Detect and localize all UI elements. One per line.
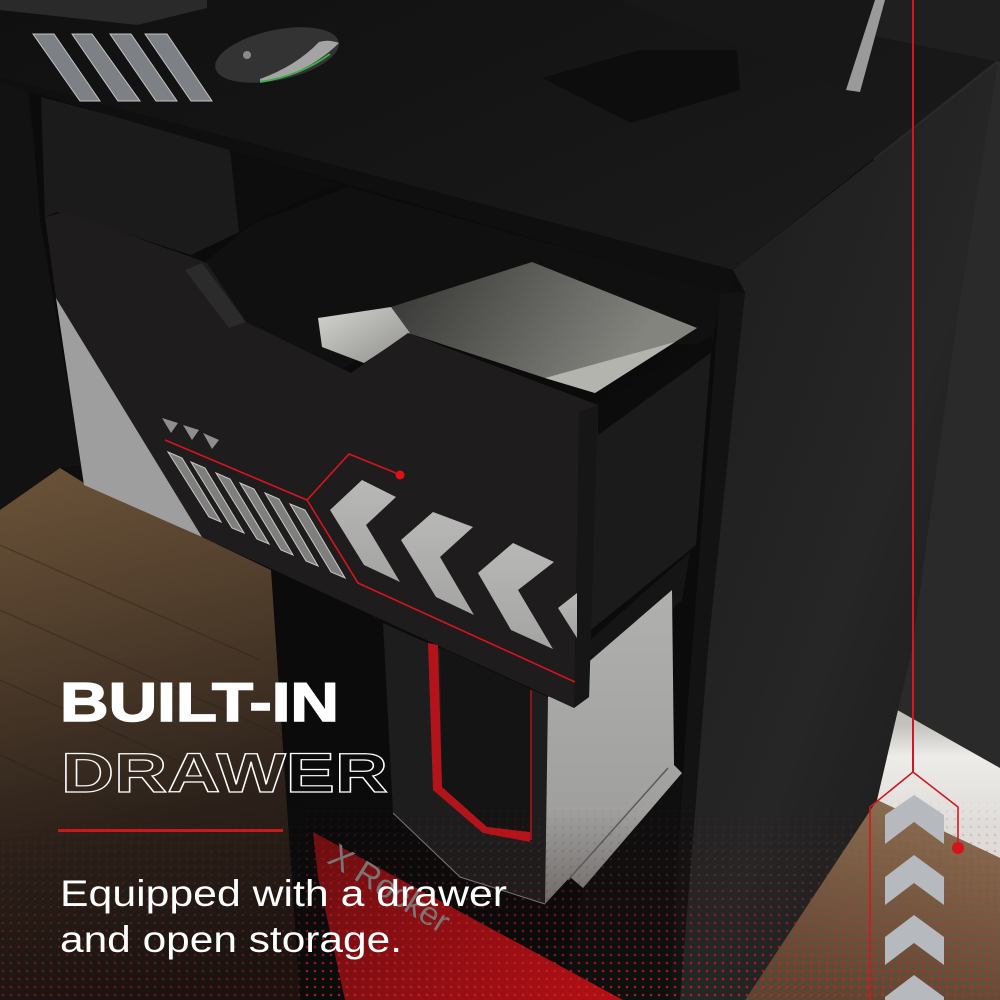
keyboard: [0, 0, 207, 25]
body text: [60, 873, 507, 960]
stripes: [168, 452, 345, 578]
PC tower: [383, 590, 682, 904]
monitor stand: [542, 0, 885, 123]
paper in drawer: [318, 262, 697, 393]
red mat logo: [313, 832, 623, 1000]
body text: Equipped with a drawer: [60, 873, 507, 914]
cabinet interior: [30, 90, 730, 1000]
compartment back panel: [41, 97, 239, 255]
lower cabinet: [560, 773, 682, 1000]
heading: drawer outline: DRAWER: [61, 741, 388, 804]
red mat logo: X Rocker: [322, 837, 457, 940]
wooden floor right: [745, 800, 1000, 1000]
drawer side: [587, 335, 712, 690]
compartment gap: [230, 150, 338, 232]
body text: and open storage.: [60, 919, 402, 960]
wooden floor left: [0, 468, 300, 1000]
triangles: [162, 418, 219, 449]
desk front edge: [0, 77, 733, 293]
desk side panel: [668, 63, 998, 1000]
chevrons: [330, 480, 577, 649]
red dot halftone: [0, 790, 1000, 1000]
wall top right: [874, 0, 1000, 62]
vertical red line and right graphic: [870, 0, 964, 1000]
drawer front panel: [45, 212, 598, 708]
heading: built-in: BUILT-IN: [60, 671, 339, 733]
desktop stripes: [33, 34, 212, 101]
mouse: [210, 17, 344, 93]
side panel front edge: [668, 292, 745, 1000]
skirting board: [877, 707, 1000, 858]
red divider: [58, 829, 283, 832]
desk top: [0, 0, 1000, 270]
red circuit line: [165, 440, 396, 500]
drawer interior: [205, 187, 722, 370]
grey accent: [56, 298, 202, 537]
drawer graphics: [162, 418, 577, 682]
